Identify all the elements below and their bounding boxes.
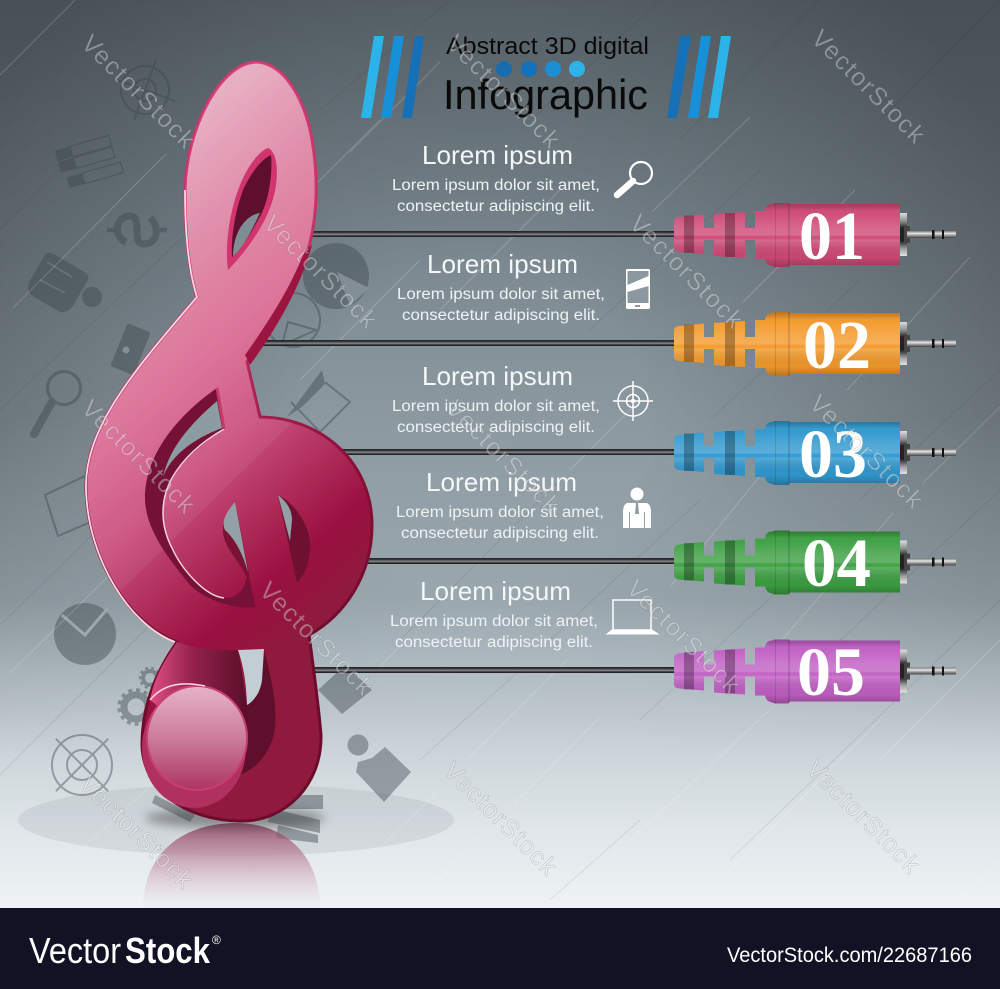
jack 05: 05	[797, 634, 865, 710]
text block 4: Lorem ipsum	[426, 467, 577, 497]
icon: target top	[104, 49, 186, 131]
jack 02	[674, 307, 956, 383]
right stripes	[667, 36, 731, 118]
text block 4: Lorem ipsum dolor sit amet,	[396, 504, 604, 521]
title block	[361, 33, 731, 118]
footer bar	[0, 908, 1000, 989]
text block 2	[397, 249, 605, 324]
text block 1: Lorem ipsum dolor sit amet,	[392, 177, 600, 194]
icon: smartphone	[626, 269, 650, 309]
icon: pie left	[54, 603, 116, 665]
inner left lens	[223, 502, 255, 605]
text block 2: Lorem ipsum dolor sit amet,	[397, 286, 605, 303]
text block 3: consectetur adipiscing elit.	[397, 419, 595, 436]
jack 03	[674, 416, 956, 492]
jack 01: 01	[799, 198, 865, 274]
clef front face	[86, 62, 372, 821]
text block 5: Lorem ipsum dolor sit amet,	[390, 613, 598, 630]
watermarks: VectorStock	[441, 394, 566, 519]
footer logo: Stock	[125, 930, 211, 971]
clef side shade	[245, 245, 312, 365]
jack 01	[674, 198, 956, 274]
icon: phone left	[110, 323, 151, 375]
footer logo: Vector	[29, 930, 121, 971]
icon: target	[613, 381, 653, 421]
title line 1: Abstract 3D digital	[446, 33, 649, 60]
reflection of treble clef	[144, 823, 320, 898]
icon: laptop right	[287, 370, 350, 432]
watermarks: VectorStock	[804, 389, 929, 514]
text block 4	[396, 467, 604, 542]
watermarks: VectorStock	[254, 576, 379, 701]
jack 02: 02	[803, 307, 871, 383]
stem opening	[238, 649, 264, 705]
watermarks: VectorStock	[258, 209, 383, 334]
text block 4: consectetur adipiscing elit.	[401, 525, 599, 542]
icon: binders	[55, 134, 123, 189]
icon: laptop left	[45, 476, 95, 536]
inner right lens	[278, 495, 310, 583]
treble clef	[60, 60, 372, 821]
icon: gears	[119, 668, 160, 724]
icon: tablet	[318, 665, 372, 714]
jack 05	[674, 634, 956, 710]
jack 03: 03	[799, 416, 867, 492]
footer url: VectorStock.com/22687166	[727, 944, 972, 967]
text block 2: consectetur adipiscing elit.	[402, 307, 600, 324]
icon: pie right	[303, 243, 369, 309]
icon: person top left	[24, 250, 102, 316]
icon: binders bottom	[152, 795, 323, 843]
text block 3	[392, 361, 600, 436]
bowl crescent hole	[145, 388, 256, 608]
watermarks	[74, 24, 931, 894]
text block 5	[390, 576, 598, 651]
clef left highlight edge	[86, 190, 197, 642]
watermarks: VectorStock	[441, 29, 566, 154]
text block 5: Lorem ipsum	[420, 576, 571, 606]
background icons	[24, 49, 411, 843]
icon: ring chart	[266, 293, 320, 347]
title line 2: Infographic	[443, 71, 648, 118]
jack 04	[674, 525, 956, 601]
icon: dollar	[107, 216, 167, 244]
text block 5: consectetur adipiscing elit.	[395, 634, 593, 651]
icon: magnifier	[617, 162, 652, 195]
text block 1: Lorem ipsum	[422, 140, 573, 170]
watermarks: VectorStock	[76, 29, 201, 154]
watermarks: VectorStock	[76, 394, 201, 519]
note ball	[142, 684, 247, 808]
text block 2: Lorem ipsum	[427, 249, 578, 279]
icon: target bottom	[30, 713, 134, 817]
watermarks: VectorStock	[806, 24, 931, 149]
text block 1	[392, 140, 600, 215]
icon: businessman	[623, 488, 651, 528]
text block 3: Lorem ipsum	[422, 361, 573, 391]
upper loop hole	[227, 148, 277, 270]
stem dark inside	[225, 650, 275, 777]
icon: magnifier left	[34, 372, 80, 434]
icon: laptop	[607, 600, 658, 634]
stem shaft	[150, 642, 249, 770]
floor shadow ellipse	[18, 784, 454, 856]
watermarks: VectorStock	[438, 756, 563, 881]
icon: person bottom	[348, 734, 411, 802]
contact shadow	[145, 808, 325, 828]
footer logo: ®	[212, 933, 221, 947]
jack 04: 04	[802, 525, 871, 601]
stereo cables	[260, 231, 676, 673]
watermarks: VectorStock	[74, 769, 199, 894]
left stripes	[361, 36, 424, 118]
watermarks: VectorStock	[621, 574, 746, 699]
text block 1: consectetur adipiscing elit.	[397, 198, 595, 215]
clef gloss highlight	[87, 62, 316, 592]
watermarks: VectorStock	[801, 754, 926, 879]
text block 3: Lorem ipsum dolor sit amet,	[392, 398, 600, 415]
watermarks: VectorStock	[624, 209, 749, 334]
title dots	[496, 61, 585, 77]
